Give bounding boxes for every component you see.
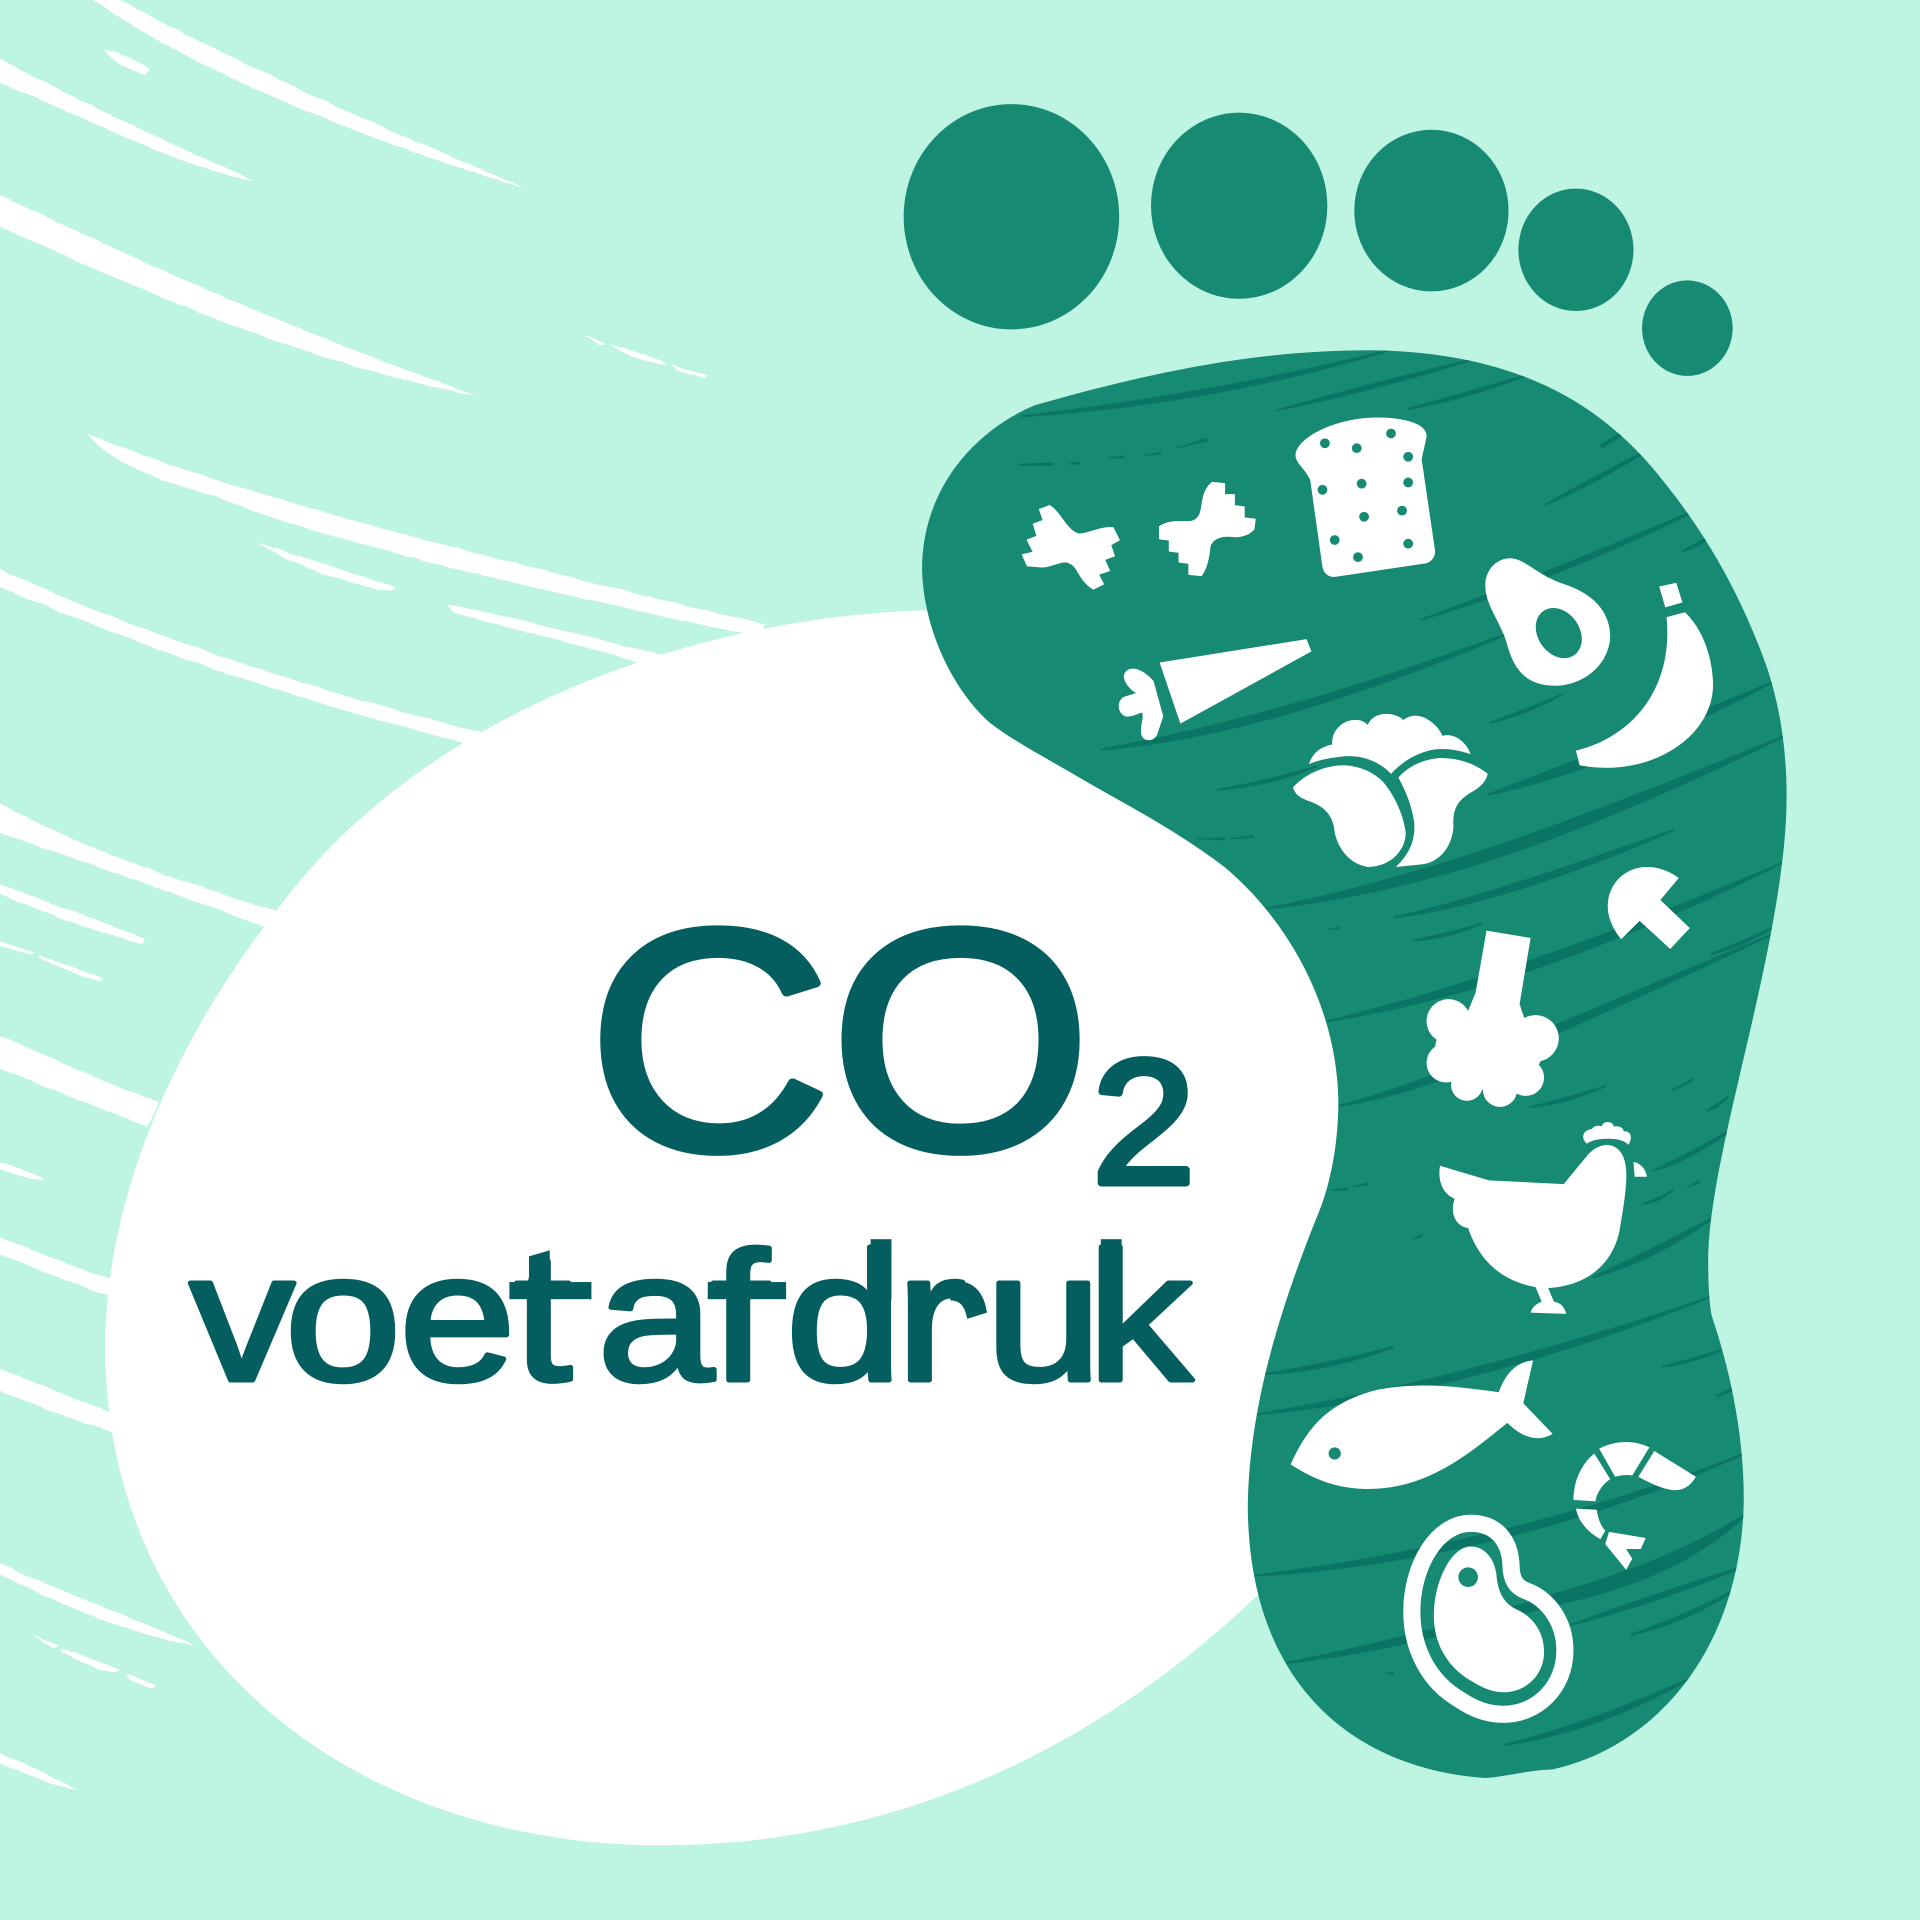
food icons — [1022, 418, 1713, 1714]
icon: carrot — [1119, 639, 1311, 740]
white brush streaks — [0, 0, 765, 1790]
icon: mushroom — [1608, 867, 1690, 949]
icon: eggplant — [1576, 583, 1713, 768]
third toe — [1354, 130, 1509, 291]
heading: CO2: O — [830, 865, 1091, 1215]
heading: voetafdruk: voetafdruk — [190, 1214, 1193, 1419]
icon: bread slice — [1296, 418, 1435, 577]
white blob — [105, 610, 1371, 1845]
icon: avocado — [1485, 558, 1610, 686]
icon: fusilli pasta left — [1022, 506, 1119, 589]
fourth toe — [1518, 189, 1633, 311]
icon: shrimp — [1573, 1442, 1696, 1570]
icon: chicken — [1439, 1122, 1647, 1314]
second toe — [1151, 113, 1327, 299]
big toe — [904, 104, 1119, 329]
little toe — [1642, 280, 1733, 376]
toes — [904, 104, 1733, 376]
heading: CO2: C — [588, 864, 831, 1215]
heading: CO2: 2 — [1092, 1024, 1195, 1221]
icon: fish — [1291, 1360, 1553, 1489]
sole texture strokes — [1019, 350, 1788, 1745]
heading: CO2 — [588, 864, 1195, 1221]
icon: fusilli pasta right — [1160, 482, 1255, 576]
icon: broccoli — [1427, 931, 1559, 1107]
icon: steak — [1412, 1523, 1565, 1714]
footprint sole — [922, 350, 1787, 1778]
icon: lettuce — [1293, 714, 1488, 867]
